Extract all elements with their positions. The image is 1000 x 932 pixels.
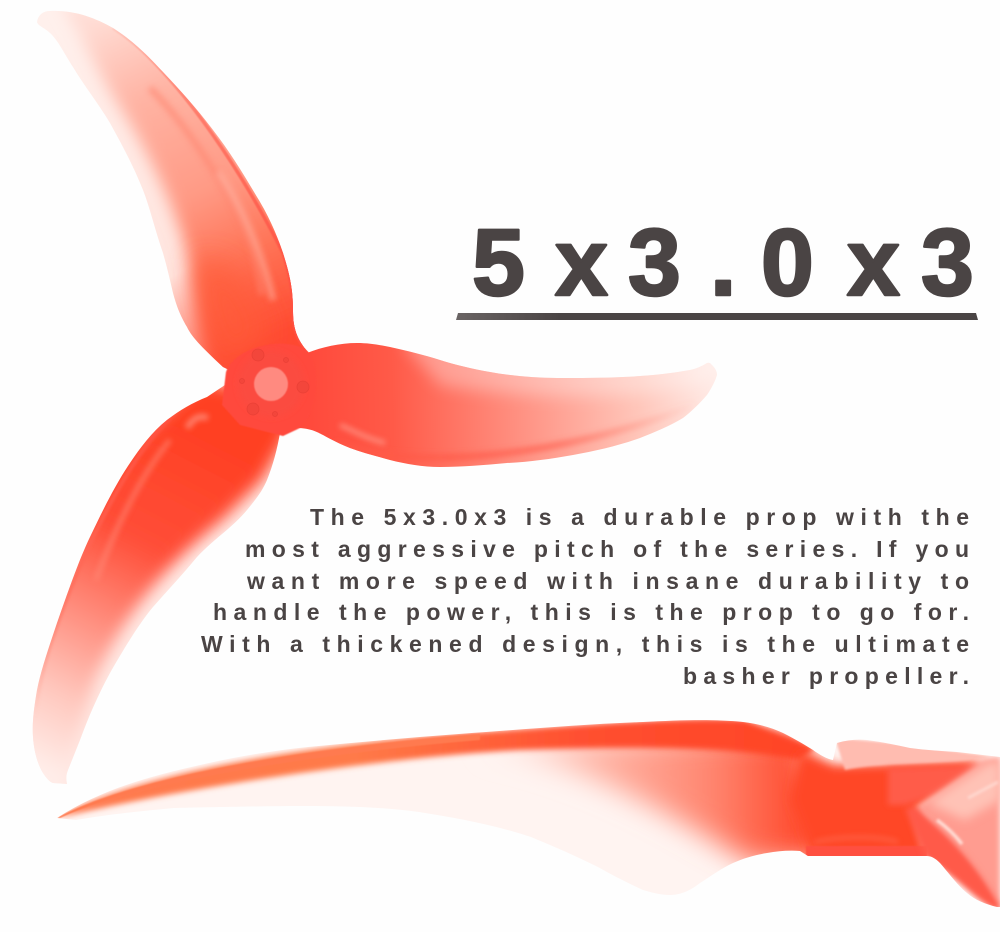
- blade: bottom left: [32, 385, 280, 784]
- propeller: side view: [50, 710, 1000, 910]
- propeller: front view with three blades: [15, 0, 730, 800]
- blade: top: [37, 11, 308, 370]
- description text block: handle the power, this is the prop to go for.: [213, 599, 969, 625]
- description text block: want more speed with insane durability to: [246, 568, 969, 594]
- hub: [222, 344, 316, 436]
- description text block: With a thickened design, this is the ultimate: [201, 631, 969, 657]
- center bore: [254, 367, 288, 401]
- description text block: [201, 504, 969, 689]
- blade: right: [298, 343, 717, 467]
- description text block: The 5x3.0x3 is a durable prop with the: [310, 504, 969, 530]
- description text block: most aggressive pitch of the series. If you: [245, 536, 969, 562]
- screw holes: [240, 349, 309, 416]
- description text block: basher propeller.: [683, 663, 969, 689]
- title: 5x3.0x3: [472, 210, 974, 316]
- title underline: [456, 313, 978, 320]
